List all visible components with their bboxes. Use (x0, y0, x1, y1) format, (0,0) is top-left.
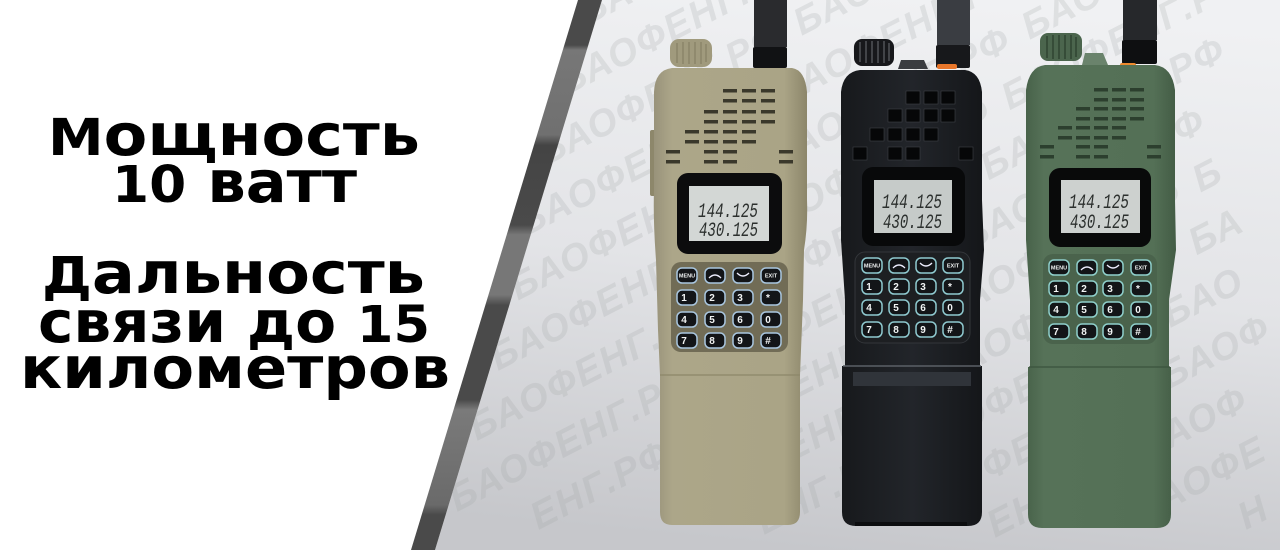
volume knob (1040, 33, 1108, 65)
keypad: 1 (681, 293, 687, 304)
watermark text rows: БАОФЕНГ.РФ БАОФЕНГ.РФ БАОФЕНГ.РФ (462, 29, 1233, 449)
heading: power and range (20, 101, 450, 402)
seam (660, 374, 800, 376)
watermark text rows: БАОФЕ (1125, 428, 1274, 532)
keypad: 1 (1053, 284, 1059, 295)
volume knob (670, 39, 712, 67)
keypad: 5 (1081, 305, 1087, 316)
heading: power and range: связи до 15 (38, 288, 430, 356)
antenna (753, 0, 787, 68)
keypad: 5 (893, 303, 899, 314)
speaker grille (666, 89, 793, 164)
keypad: 8 (709, 336, 715, 347)
keypad (671, 262, 788, 352)
keypad: EXIT (1135, 266, 1148, 272)
watermark text rows: БАОФЕНГ.РФ БАОФЕНГ.РФ БАОФЕНГ.РФ (442, 100, 1213, 520)
keypad: 1 (866, 282, 872, 293)
screen (862, 167, 965, 246)
keypad: # (1135, 327, 1141, 338)
keypad: 6 (1107, 305, 1113, 316)
keypad: MENU (679, 274, 695, 280)
body (654, 68, 807, 525)
antenna (936, 0, 970, 69)
watermark text rows: БАОФЕНГ.РФ БАОФ (898, 307, 1278, 528)
keypad: * (1136, 284, 1140, 295)
keypad: 9 (1107, 327, 1113, 338)
watermark text rows: ЕНГ.РФ БАОФЕНГ.РФ БАО (749, 259, 1251, 543)
keypad: 2 (709, 293, 715, 304)
body (1026, 65, 1176, 528)
keypad (855, 252, 970, 343)
keypad: 4 (866, 303, 872, 314)
side button (650, 130, 656, 196)
antenna (1120, 0, 1157, 68)
heading: power and range: Дальность (42, 239, 425, 307)
keypad: 9 (920, 325, 926, 336)
keypad: 3 (1107, 284, 1113, 295)
speaker grille (1040, 88, 1161, 158)
keypad: 4 (681, 315, 687, 326)
radio: tan (650, 0, 807, 525)
heading: power and range: Мощность (48, 101, 420, 169)
volume knob (854, 39, 928, 69)
keypad: MENU (1051, 266, 1067, 272)
keypad: 0 (1135, 305, 1141, 316)
keypad: 2 (1081, 284, 1087, 295)
speaker grille (853, 91, 973, 160)
watermark text rows: ЕНГ.РФ БАОФЕНГ.РФ БАОФЕНГ.РФ Б (524, 150, 1230, 538)
radio: green (1026, 0, 1176, 528)
screen (677, 173, 782, 254)
heading: power and range: километров (20, 334, 450, 402)
keypad: * (948, 282, 952, 293)
screen (1049, 168, 1151, 247)
keypad: # (947, 325, 953, 336)
radio: black (841, 0, 984, 526)
keypad: 5 (709, 315, 715, 326)
seam (1029, 366, 1170, 368)
keypad: * (766, 293, 770, 304)
keypad: # (765, 336, 771, 347)
keypad: 7 (681, 336, 687, 347)
keypad: 3 (737, 293, 743, 304)
keypad: 4 (1053, 305, 1059, 316)
keypad: 7 (866, 325, 872, 336)
body (841, 70, 984, 526)
keypad: 0 (947, 303, 953, 314)
screen: 144.125 (698, 201, 758, 224)
seam and battery latch (843, 366, 981, 526)
keypad: 7 (1053, 327, 1059, 338)
keypad (1043, 254, 1157, 344)
watermark text rows: ЕНГ.РФ БАОФ (980, 378, 1255, 546)
screen: 430.125 (1070, 212, 1129, 235)
keypad: 3 (920, 282, 926, 293)
keypad: EXIT (947, 264, 960, 270)
keypad: 0 (765, 315, 771, 326)
heading: power and range: 10 ватт (112, 148, 357, 216)
keypad: 2 (893, 282, 899, 293)
keypad: 8 (1081, 327, 1087, 338)
screen: 430.125 (699, 220, 758, 243)
panel: grey watermark background (435, 0, 1280, 550)
keypad: MENU (864, 264, 880, 270)
keypad: 6 (737, 315, 743, 326)
keypad: EXIT (765, 274, 778, 280)
keypad: 6 (920, 303, 926, 314)
watermark text rows: Н (1231, 487, 1276, 538)
diagonal dark band (411, 0, 602, 550)
keypad: 8 (893, 325, 899, 336)
screen: 144.125 (882, 192, 942, 215)
watermark text rows: БАОФЕНГ.РФ БАОФЕНГ.РФ БА (670, 200, 1251, 524)
screen: 430.125 (883, 212, 942, 235)
keypad: 9 (737, 336, 743, 347)
screen: 144.125 (1069, 192, 1129, 215)
